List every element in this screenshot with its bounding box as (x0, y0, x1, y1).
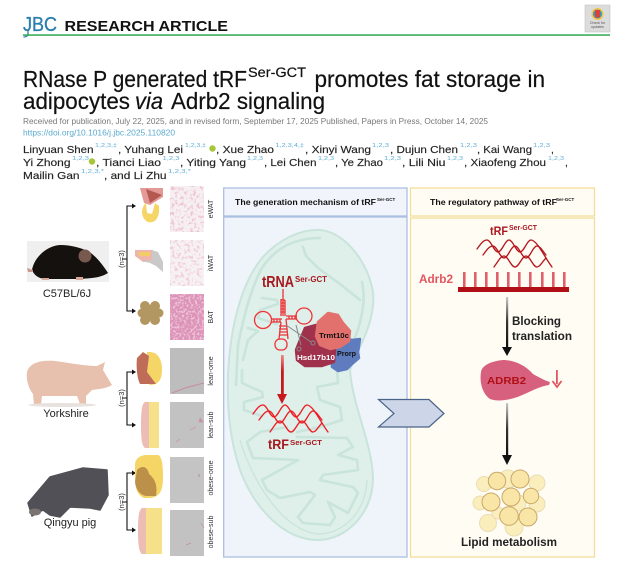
icon: iWAT tissue (135, 250, 163, 272)
authors: 1,2,3,4,‡ (276, 143, 304, 149)
label: tRF Ser-GCT: Ser-GCT (290, 438, 322, 447)
journal header: RESEARCH ARTICLE (64, 19, 228, 35)
authors: , Lei Chen (264, 158, 317, 169)
label: tRNA Ser-GCT: tRNA (262, 274, 294, 291)
icon: check for updates: updates (591, 25, 604, 29)
bracket: Yorkshire tissues (117, 370, 136, 428)
protein: ADRB2 (481, 360, 550, 400)
panel heading: regulatory pathway: The regulatory pathway of tRF (430, 197, 557, 207)
tissue labels: lean-ome (208, 356, 215, 386)
protein complex: Hsd17b10 (296, 325, 335, 366)
icon: obese subcutaneous fat (138, 508, 162, 554)
histology: lean-ome (170, 348, 204, 394)
authors: 1,2,3,‡ (95, 143, 117, 149)
protein complex: Trmt10c (316, 313, 350, 349)
label: tRF Ser-GCT (268, 437, 322, 452)
doi link: https://doi.org/10.1016/j.jbc.2025.110820 (23, 128, 176, 138)
label: tRF Ser-GCT: Ser-GCT (509, 223, 537, 232)
icon: obese omental fat (135, 455, 163, 498)
title: Ser-GCT (248, 65, 306, 80)
authors: Yi Zhong (23, 158, 71, 169)
bracket: Yorkshire tissues: (n=3) (117, 389, 126, 407)
tRF duplex (253, 405, 328, 432)
tissue labels (208, 199, 215, 548)
authors: , (551, 145, 554, 156)
authors: 1,2,3 (533, 143, 550, 149)
label: tRF Ser-GCT: tRF (490, 224, 508, 238)
icon: check for updates: Check for (590, 21, 606, 25)
label: Qingyu pig: Qingyu pig (44, 517, 96, 529)
title: promotes fat storage in (314, 66, 545, 92)
arrow: chevron between panels (378, 400, 444, 427)
animal: Qingyu pig (28, 468, 108, 517)
authors: 1,2,3 (162, 156, 180, 162)
authors: 1,2,3 (72, 156, 89, 162)
title: Adrb2 signaling (171, 88, 325, 114)
label: tRF Ser-GCT (490, 223, 537, 238)
icon: lean subcutaneous fat (141, 402, 159, 448)
title: adipocytes (23, 88, 130, 114)
authors: , Xiaofeng Zhou (464, 158, 546, 169)
panel heading: generation mechanism: The generation mechanism of tRF (235, 197, 376, 207)
tissue labels: eWAT (208, 199, 215, 218)
journal header (23, 14, 610, 37)
panel heading: regulatory pathway: Ser-GCT (556, 197, 575, 202)
authors: 1,2,3 (447, 156, 463, 162)
authors: , Xinyi Wang (305, 145, 371, 156)
histology: BAT (170, 294, 204, 340)
authors: , Ye Zhao (335, 158, 383, 169)
icon: lean omental fat (137, 352, 162, 385)
protein complex: Prorp (331, 338, 360, 371)
authors: , Xue Zhao (216, 145, 274, 156)
icon: eWAT tissue (140, 188, 163, 222)
arrow: blocking (502, 297, 512, 356)
icon: scissors (286, 325, 315, 351)
histology: iWAT (170, 240, 204, 286)
bracket: Qingyu tissues (117, 470, 136, 532)
protein complex: Hsd17b10: Hsd17b10 (297, 353, 335, 362)
authors: Linyuan Shen (23, 145, 94, 156)
authors: 1,2,3 (460, 143, 477, 149)
arrow: tRNA to tRF (277, 355, 287, 404)
bracket: Qingyu tissues: (n=3) (117, 493, 126, 511)
animal: Yorkshire pig (27, 361, 112, 407)
title: via (135, 88, 163, 114)
authors (23, 143, 568, 182)
label: tRNA Ser-GCT: Ser-GCT (295, 275, 327, 284)
histology: lean-sub (170, 402, 204, 448)
authors: 1,2,3 (548, 156, 564, 162)
protein complex: Trmt10c: Trmt10c (319, 331, 349, 340)
tRF duplex (477, 240, 552, 267)
icon: BAT tissue (138, 301, 164, 325)
tissue labels: iWAT (208, 254, 215, 271)
authors: 1,2,3,* (81, 169, 105, 175)
tissue labels: lean-sub (208, 411, 215, 438)
icon: check for updates (585, 5, 610, 32)
label: blocking translation: translation (512, 329, 572, 343)
label: lipid metabolism: Lipid metabolism (461, 535, 557, 549)
bracket: mouse tissues: (n=3) (117, 250, 126, 268)
authors: 1,2,3 (318, 156, 334, 162)
authors: 1,2,3,‡ (185, 143, 206, 149)
tissue labels: obese-sub (208, 516, 215, 548)
tRNA cloverleaf (254, 289, 312, 350)
panel heading: generation mechanism: Ser-GCT (377, 197, 396, 202)
publication dates: Received for publication, July 22, 2025, and in revised form, September 17, 2025 Published, Papers in Press, October 14, 2025 (23, 117, 489, 126)
icon: adipocyte cluster (473, 470, 545, 536)
label: blocking translation: Blocking (512, 314, 561, 328)
label: tRNA Ser-GCT (262, 274, 327, 291)
authors: 1,2,3 (384, 156, 401, 162)
label: blocking translation (512, 314, 572, 343)
authors: 1,2,3 (247, 156, 263, 162)
authors: , Lili Niu (402, 158, 446, 169)
authors: 1,2,3,* (168, 169, 192, 175)
arrow: to lipid metabolism (502, 403, 512, 465)
tissue labels: BAT (208, 310, 215, 324)
panel: regulatory pathway (410, 188, 594, 557)
authors: , and Li Zhu (104, 171, 167, 182)
journal header: JBC (23, 14, 57, 36)
authors: , Yuhang Lei (118, 145, 183, 156)
panel: generation mechanism (224, 188, 407, 557)
label: C57BL/6J: C57BL/6J (43, 288, 91, 300)
histology: obese-sub (170, 510, 204, 556)
authors: , (565, 158, 568, 169)
title: RNase P generated tRF (23, 66, 247, 92)
label: Yorkshire: Yorkshire (43, 408, 89, 420)
mitochondrion (228, 230, 373, 540)
label: Adrb2: Adrb2 (419, 272, 453, 286)
authors: Mailin Gan (23, 171, 80, 182)
authors: 1,2,3 (372, 143, 389, 149)
title (23, 65, 545, 114)
authors: , Tianci Liao (96, 158, 161, 169)
authors: , Yiting Yang (180, 158, 246, 169)
bracket: mouse tissues (117, 204, 136, 314)
tissue labels: obese-ome (208, 460, 215, 496)
panel heading: regulatory pathway (410, 188, 594, 216)
panel heading: generation mechanism (224, 188, 407, 216)
Adrb2 mRNA (458, 272, 569, 292)
authors: , Dujun Chen (390, 145, 458, 156)
authors: , Kai Wang (477, 145, 532, 156)
histology: obese-ome (170, 457, 204, 503)
histology: eWAT (170, 186, 204, 232)
label: tRF Ser-GCT: tRF (268, 437, 289, 452)
animal: C57BL/6J mouse photo (27, 241, 109, 282)
protein: ADRB2: ADRB2 (487, 376, 526, 387)
arrow: ADRB2 decrease (552, 370, 562, 387)
protein complex: Prorp: Prorp (337, 349, 356, 358)
